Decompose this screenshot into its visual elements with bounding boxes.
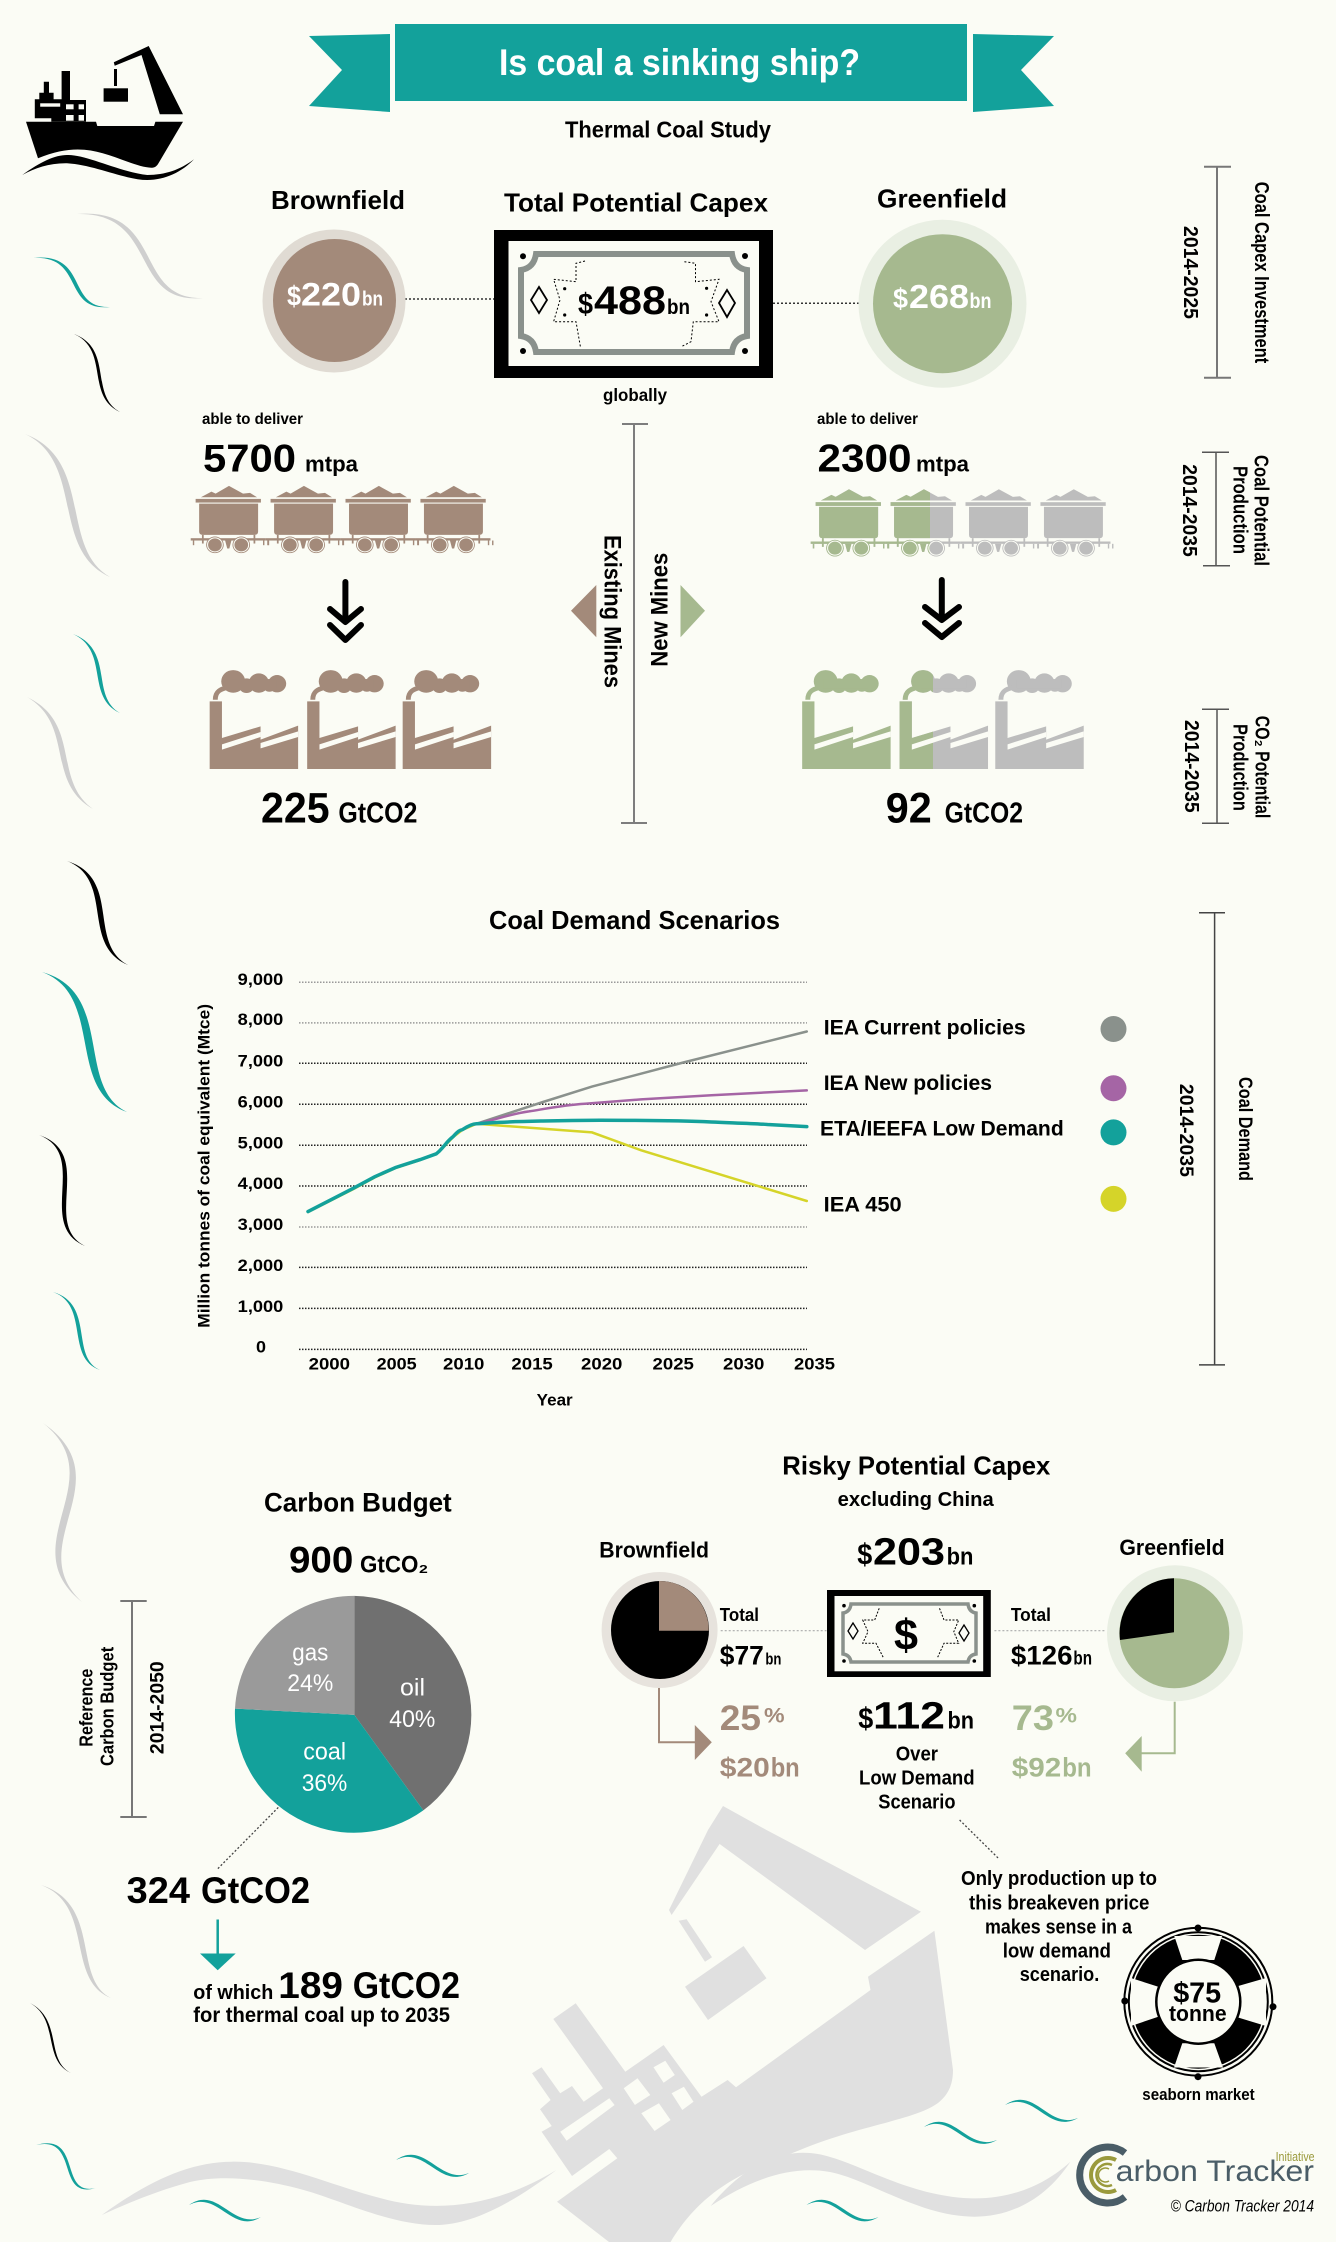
text: breakeven note: makes sense in a xyxy=(985,1915,1133,1938)
text: breakeven note: this breakeven price xyxy=(969,1891,1149,1914)
text: of which 189 GtCO2 for thermal coal xyxy=(193,1965,460,2027)
brownfield circle $220bn: 220 xyxy=(301,277,361,313)
value: 900 GtCO2: GtCO₂ xyxy=(360,1552,428,1578)
arrow: teal down xyxy=(200,1920,236,1970)
value: $203bn: $ xyxy=(857,1538,873,1571)
icon: green and grey factories xyxy=(802,670,1084,769)
series labels: IEA New policies xyxy=(824,1071,992,1095)
side bracket: coal potential production: Coal Potential xyxy=(1250,455,1272,566)
y axis title: Million tonnes of coal equivalent (Mtce) xyxy=(195,1004,214,1328)
logo: Carbon Tracker: arbon Tracker xyxy=(1116,2155,1314,2188)
text: of which 189 GtCO2 for thermal coal: 189 xyxy=(278,1965,343,2006)
value: 225 GtCO2: GtCO2 xyxy=(338,798,417,830)
value: 900 GtCO2: 900 xyxy=(289,1540,353,1580)
series lines xyxy=(308,1032,807,1212)
text: of which 189 GtCO2 for thermal coal: of which xyxy=(193,1982,273,2004)
greenfield circle $268bn: bn xyxy=(970,290,992,313)
line chart: coal demand scenarios xyxy=(195,971,1127,1410)
y axis labels: 1,000 xyxy=(238,1298,283,1316)
heading: Greenfield: Greenfield xyxy=(877,183,1007,213)
centre bracket: existing and new mines xyxy=(571,424,705,823)
text: $112bn over low demand scenario: 112 xyxy=(873,1695,945,1737)
x axis labels: 2000 xyxy=(309,1356,350,1374)
y axis labels: 4,000 xyxy=(238,1175,283,1193)
decorative teal waves along the bottom xyxy=(36,2100,1078,2221)
banknote: dollar: $ xyxy=(894,1611,918,1660)
x axis labels: 2020 xyxy=(581,1356,622,1374)
value: 92 GtCO2 xyxy=(886,785,1023,833)
heading: Brownfield: Brownfield xyxy=(271,185,405,215)
ghost sinking ship watermark xyxy=(532,1806,953,2242)
side bracket: CO2 potential production: Production xyxy=(1228,724,1250,811)
text: of which 189 GtCO2 for thermal coal: for thermal coal up to 2035 xyxy=(193,2004,450,2027)
value: 324 GtCO2: 324 xyxy=(127,1870,190,1911)
text: 73% $92bn: $92 xyxy=(1012,1753,1061,1783)
brownfield circle $220bn: bn xyxy=(362,289,383,311)
text: 25% $20bn: 25 xyxy=(720,1699,761,1738)
side bracket: coal potential production: 2014-2035 xyxy=(1178,464,1200,557)
text: greenfield able to deliver 2300 mtpa: mtpa xyxy=(916,452,970,477)
background wave: grey left xyxy=(102,2162,556,2225)
value: $203bn: bn xyxy=(947,1543,973,1570)
greenfield circle $268bn xyxy=(858,220,1026,388)
dotted connectors xyxy=(721,1630,1106,1632)
text: $112bn over low demand scenario: bn xyxy=(948,1707,974,1734)
gridlines xyxy=(299,982,807,1349)
side bracket: coal capex investment: Coal Capex Investment xyxy=(1250,182,1272,364)
text: greenfield able to deliver 2300 mtpa: able to deliver xyxy=(817,411,918,428)
text: greenfield total $126bn xyxy=(1011,1604,1092,1670)
icon: lifebuoy $75 tonne: $75 xyxy=(1173,1978,1221,2010)
y axis labels: 3,000 xyxy=(238,1216,283,1234)
x axis title: Year xyxy=(537,1390,573,1410)
text: of which 189 GtCO2 for thermal coal: GtCO2 xyxy=(353,1965,460,2006)
y axis labels: 8,000 xyxy=(238,1011,283,1029)
x axis labels: 2015 xyxy=(511,1356,553,1374)
arrow right green xyxy=(680,585,705,637)
text: brownfield total $77bn: Total xyxy=(720,1604,759,1625)
side bracket: coal demand xyxy=(1175,913,1255,1365)
text: breakeven note: low demand xyxy=(1003,1939,1111,1962)
icon: green and grey coal wagons xyxy=(811,489,1113,556)
series labels: ETA/IEEFA Low Demand xyxy=(820,1116,1064,1140)
greenfield circle $268bn: 268 xyxy=(909,278,969,315)
banknote $488bn: bn xyxy=(667,296,690,319)
logo: Carbon Tracker xyxy=(1080,2147,1315,2203)
value: 225 GtCO2 xyxy=(261,785,417,833)
y axis labels: 2,000 xyxy=(238,1257,283,1275)
subtitle: Thermal Coal Study xyxy=(565,117,771,143)
heading: Risky Potential Capex: Risky Potential Capex xyxy=(782,1450,1051,1480)
y axis labels: 6,000 xyxy=(238,1094,283,1112)
x axis labels: 2030 xyxy=(723,1356,764,1374)
brownfield circle $220bn: $ xyxy=(287,281,301,312)
y axis labels: 9,000 xyxy=(238,971,283,989)
brownfield circle $220bn xyxy=(262,230,406,372)
text: brownfield able to deliver 5700 mtpa: 5700 xyxy=(203,438,296,481)
arrow: brownfield double down xyxy=(330,582,361,640)
heading: Carbon Budget: Carbon Budget xyxy=(264,1487,452,1517)
text: brownfield total $77bn: $77 xyxy=(720,1640,764,1670)
text: $112bn over low demand scenario: Over xyxy=(896,1743,938,1766)
slice labels: oil xyxy=(400,1675,425,1702)
icon: cargo ship xyxy=(22,46,194,180)
pie: greenfield risky share xyxy=(1107,1565,1243,1701)
x axis labels: 2025 xyxy=(652,1356,694,1374)
side bracket: coal demand: Coal Demand xyxy=(1234,1077,1255,1181)
text: breakeven note: scenario. xyxy=(1020,1963,1099,1986)
banknote: dollar xyxy=(827,1590,991,1677)
heading: Total Potential Capex: Total Potential Capex xyxy=(504,188,769,218)
text: greenfield total $126bn: Total xyxy=(1011,1604,1051,1625)
existing mines label: Existing Mines xyxy=(598,535,625,688)
decorative waves down the left edge xyxy=(25,214,203,2073)
side bracket: coal capex investment: 2014-2025 xyxy=(1179,226,1201,319)
value: 324 GtCO2: GtCO2 xyxy=(201,1870,310,1911)
value: 225 GtCO2: 225 xyxy=(261,785,330,833)
side bracket: CO2 potential production: CO₂ Potential xyxy=(1250,716,1272,818)
label: Greenfield: Greenfield xyxy=(1119,1535,1225,1560)
ribbon left xyxy=(309,34,390,112)
value: $203bn: 203 xyxy=(873,1531,945,1573)
logo: Carbon Tracker: Initiative xyxy=(1276,2150,1315,2164)
new mines label: New Mines xyxy=(646,553,674,667)
text: 73% $92bn: bn xyxy=(1062,1753,1092,1783)
text: 25% $20bn: bn xyxy=(771,1753,800,1783)
text: brownfield total $77bn: bn xyxy=(765,1649,781,1668)
background wave: grey right xyxy=(711,2153,1070,2217)
label: globally: globally xyxy=(603,385,667,405)
arrow: greenfield elbow xyxy=(1125,1702,1175,1772)
text: 73% $92bn xyxy=(1012,1699,1092,1783)
greenfield circle $268bn: $ xyxy=(893,283,908,314)
connector dotted lines xyxy=(405,299,859,303)
text: 73% $92bn: 73 xyxy=(1012,1699,1054,1738)
value: 324 GtCO2 xyxy=(127,1870,310,1911)
arrow: greenfield double down xyxy=(925,580,959,637)
slice: coal xyxy=(235,1709,423,1833)
banner bar xyxy=(395,24,967,101)
y axis labels xyxy=(238,971,283,1356)
side bracket: reference carbon budget: Reference xyxy=(76,1669,96,1747)
ribbon right xyxy=(973,34,1054,112)
banknote $488bn: $ xyxy=(578,288,593,321)
text: 25% $20bn: % xyxy=(764,1705,785,1728)
dotted leader to breakeven note xyxy=(960,1820,998,1858)
text: brownfield able to deliver 5700 mtpa: mtpa xyxy=(305,452,359,477)
banknote $488bn: 488 xyxy=(594,279,666,323)
text: 25% $20bn: $20 xyxy=(720,1753,770,1783)
y axis labels: 5,000 xyxy=(238,1135,283,1153)
text: 25% $20bn xyxy=(720,1699,800,1783)
slice: gas xyxy=(235,1596,354,1715)
slice labels: gas xyxy=(292,1640,328,1666)
y axis labels: 0 xyxy=(256,1338,266,1356)
side bracket: CO2 potential production: 2014-2035 xyxy=(1180,720,1202,813)
label: Brownfield: Brownfield xyxy=(599,1538,709,1563)
series labels: IEA 450 xyxy=(824,1192,902,1216)
side bracket: coal capex investment xyxy=(1179,167,1272,378)
series labels: IEA Current policies xyxy=(824,1015,1026,1039)
icon: lifebuoy $75 tonne xyxy=(1121,1924,1276,2080)
side bracket: reference carbon budget xyxy=(76,1601,168,1817)
icon: brown factories xyxy=(210,670,491,769)
pie chart: carbon budget xyxy=(235,1596,471,1833)
slice labels: 36% xyxy=(302,1770,347,1797)
pie: brownfield risky share xyxy=(602,1572,718,1688)
banknote $488bn xyxy=(494,230,773,378)
x axis labels: 2005 xyxy=(377,1356,417,1374)
text: $112bn over low demand scenario: Scenario xyxy=(878,1790,956,1813)
text: breakeven note: Only production up to xyxy=(961,1867,1157,1890)
arrow: brownfield elbow xyxy=(659,1688,712,1760)
side bracket: coal potential production: Production xyxy=(1228,466,1250,554)
text: breakeven note xyxy=(961,1867,1157,1986)
side bracket: coal potential production xyxy=(1178,452,1272,566)
slice labels: 40% xyxy=(389,1706,435,1733)
icon: brown coal wagons xyxy=(191,486,493,553)
text: 73% $92bn: % xyxy=(1056,1705,1077,1728)
text: greenfield total $126bn: $126 xyxy=(1011,1640,1072,1670)
slice: oil xyxy=(354,1596,471,1810)
slice labels: 24% xyxy=(287,1670,333,1697)
value: 900 GtCO2 xyxy=(289,1540,428,1580)
heading: Coal Demand Scenarios: Coal Demand Scenarios xyxy=(489,905,780,935)
title: Is coal a sinking ship? xyxy=(499,42,860,83)
value: 92 GtCO2: GtCO2 xyxy=(945,798,1023,830)
subheading: excluding China: excluding China xyxy=(838,1489,995,1511)
text: $112bn over low demand scenario: Low Demand xyxy=(859,1766,975,1789)
y axis labels: 7,000 xyxy=(238,1053,283,1071)
side bracket: reference carbon budget: 2014-2050 xyxy=(147,1661,168,1754)
value: 92 GtCO2: 92 xyxy=(886,785,932,833)
side bracket: coal demand: 2014-2035 xyxy=(1175,1084,1196,1177)
text: greenfield able to deliver 2300 mtpa: 2300 xyxy=(818,438,912,481)
text: greenfield total $126bn: bn xyxy=(1073,1648,1092,1669)
label: seaborn market: seaborn market xyxy=(1142,2085,1255,2104)
slice labels xyxy=(287,1640,435,1797)
slice labels: coal xyxy=(303,1739,346,1766)
side bracket: reference carbon budget: Carbon Budget xyxy=(97,1647,117,1766)
text: brownfield able to deliver 5700 mtpa xyxy=(202,411,359,481)
series labels xyxy=(820,1015,1064,1216)
title banner xyxy=(309,24,1054,112)
legend dots xyxy=(1100,1016,1126,1042)
text: brownfield total $77bn xyxy=(720,1604,781,1670)
text: greenfield able to deliver 2300 mtpa xyxy=(817,411,970,481)
text: $112bn over low demand scenario: $ xyxy=(858,1702,873,1735)
dotted leader from coal slice xyxy=(218,1807,278,1869)
side bracket: CO2 potential production xyxy=(1180,709,1272,823)
arrow left brown xyxy=(571,585,596,637)
x axis labels: 2035 xyxy=(794,1356,835,1374)
text: brownfield able to deliver 5700 mtpa: able to deliver xyxy=(202,411,303,428)
x axis labels: 2010 xyxy=(443,1356,484,1374)
icon: lifebuoy $75 tonne: tonne xyxy=(1169,2001,1227,2026)
x axis labels xyxy=(309,1356,835,1374)
text: $112bn over low demand scenario xyxy=(858,1695,975,1813)
